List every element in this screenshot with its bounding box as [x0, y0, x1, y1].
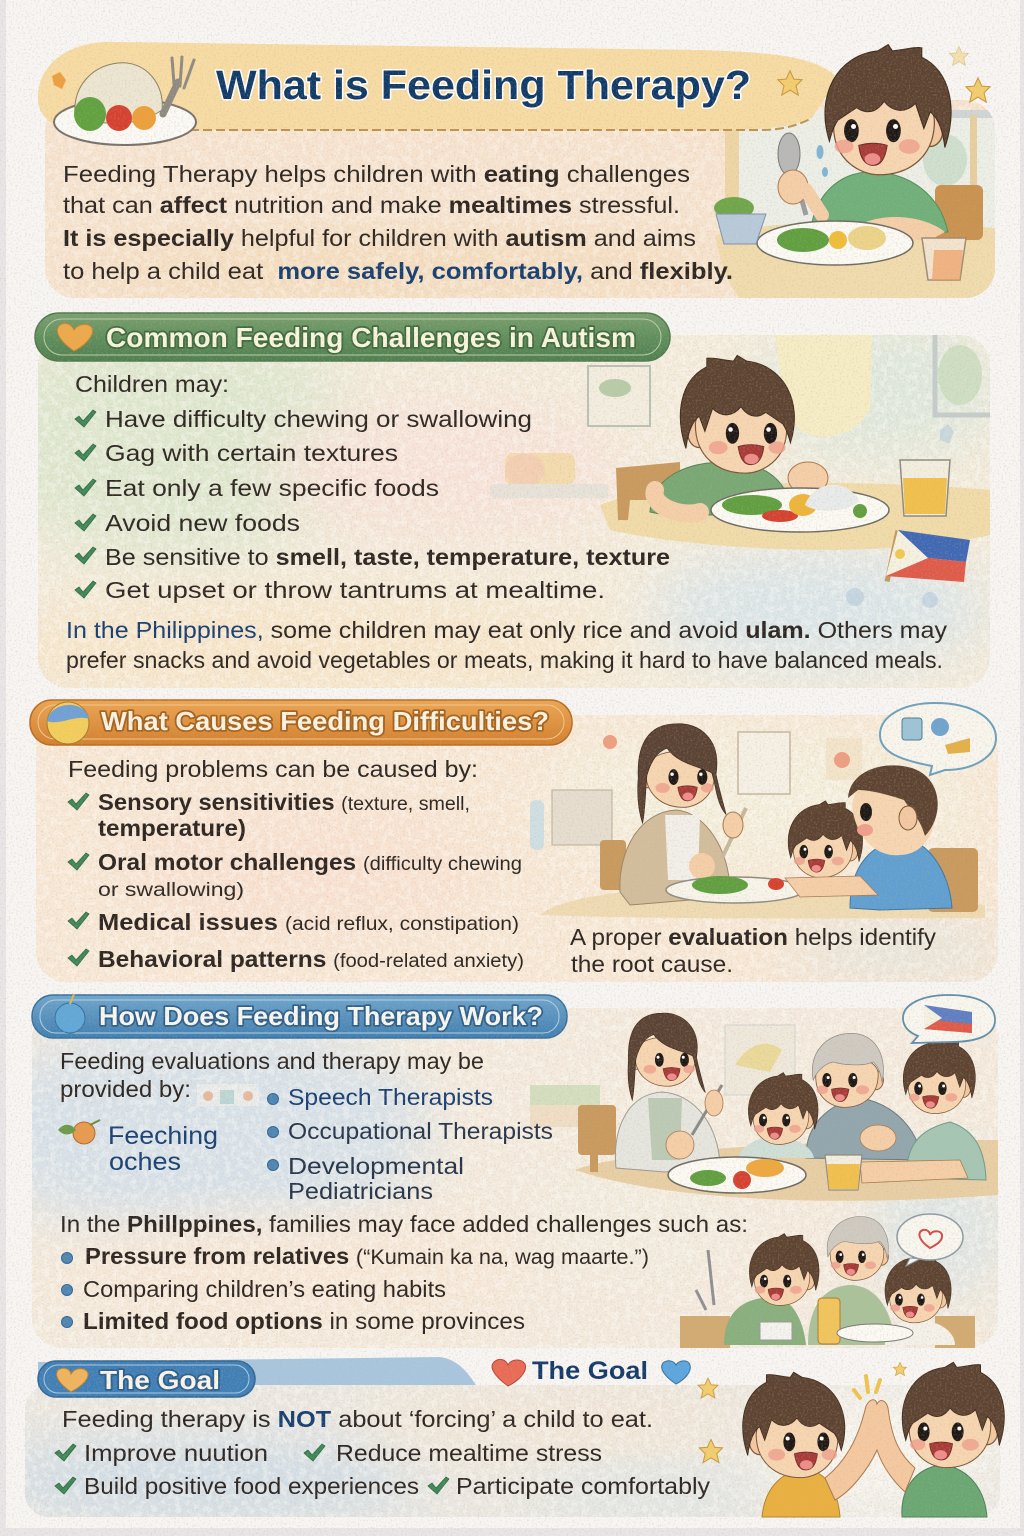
- challenges list: Eat only a few specific foods: [105, 475, 439, 501]
- panel: how does feeding therapy work: [0, 994, 1010, 1348]
- providers text: provided by:: [60, 1076, 191, 1102]
- light blue band: [38, 1357, 480, 1392]
- banner: the goal: [38, 1361, 255, 1397]
- goal text: Reduce mealtime stress: [336, 1440, 602, 1466]
- illustration: children high five: [743, 1362, 1004, 1517]
- wall pictures: [530, 732, 862, 850]
- icon: stars: [698, 1362, 907, 1463]
- providers text: Feeding evaluations and therapy may be: [60, 1048, 484, 1074]
- causes list: Medical issues (acid reflux, constipation): [98, 909, 519, 935]
- icon: heart: [57, 323, 93, 351]
- icon: small food stickers: [197, 1084, 259, 1106]
- speech bubble with heart: [897, 1214, 963, 1266]
- secondary goal label: [492, 1357, 690, 1386]
- glass of juice: [922, 238, 966, 280]
- wall picture: [588, 366, 650, 426]
- banner: what causes: [30, 700, 572, 745]
- added challenges text: In the Phillppines, families may face added challenges such as:: [60, 1211, 748, 1237]
- intro text: [63, 161, 733, 284]
- panel background: [38, 335, 990, 688]
- challenges list: Children may:: [75, 371, 229, 397]
- heading: What Causes Feeding Difficulties?: [101, 706, 549, 736]
- sparkle: [854, 1376, 880, 1398]
- icon: fruit: [58, 1120, 100, 1144]
- small boy: [788, 801, 863, 878]
- icon: stars: [52, 47, 990, 102]
- evaluation note: [570, 924, 937, 977]
- panel background: [0, 1008, 1010, 1348]
- providers text: Speech Therapists: [288, 1084, 493, 1110]
- philippines note: [66, 617, 948, 673]
- banner: how does it work: [32, 994, 567, 1038]
- challenges list: Get upset or throw tantrums at mealtime.: [105, 577, 605, 603]
- older boy: [860, 1039, 986, 1183]
- illustration: boy at table: [616, 355, 950, 532]
- illustration: boy with spoon: [714, 45, 983, 280]
- icon: apple: [55, 994, 85, 1033]
- glass of juice: [900, 460, 950, 516]
- causes list: temperature): [98, 815, 246, 841]
- heading: Common Feeding Challenges in Autism: [106, 322, 636, 353]
- plate of food: [757, 221, 913, 265]
- panel background: [36, 715, 1010, 982]
- mother: [615, 1013, 723, 1172]
- intro text: to help a child eat more safely, comfortably, and flexibly.: [63, 258, 733, 284]
- added challenges text: Limited food options in some provinces: [83, 1308, 525, 1334]
- challenges list: Avoid new foods: [105, 510, 300, 536]
- older boy: [785, 765, 952, 910]
- intro text: that can affect nutrition and make mealtimes stressful.: [63, 192, 680, 218]
- illustration: children with grandfather: [680, 1217, 975, 1348]
- window: [935, 335, 990, 415]
- causes list: Behavioral patterns (food-related anxiety): [98, 946, 524, 972]
- title: What is Feeding Therapy?: [216, 62, 751, 108]
- panel body: [45, 100, 995, 300]
- evaluation note: the root cause.: [571, 951, 733, 977]
- decorative splashes: [846, 424, 954, 608]
- small child: [738, 1073, 818, 1158]
- challenges list: Have difficulty chewing or swallowing: [105, 406, 532, 432]
- providers text: Developmental: [288, 1153, 464, 1179]
- causes list: Oral motor challenges (difficulty chewing: [98, 849, 522, 875]
- mother: [620, 724, 746, 905]
- header band: [38, 42, 838, 130]
- glass of juice: [825, 1155, 862, 1190]
- goal text: Participate comfortably: [456, 1473, 711, 1499]
- challenges list: [75, 371, 670, 603]
- panel: the goal: [0, 1357, 1004, 1520]
- challenges list: Be sensitive to smell, taste, temperature, texture: [105, 544, 670, 570]
- added challenges text: Comparing children’s eating habits: [83, 1276, 446, 1302]
- table: [575, 1140, 998, 1201]
- curtain: [775, 335, 872, 436]
- providers text: Feeching: [108, 1122, 218, 1150]
- panel: what causes feeding difficulties: [30, 700, 1010, 982]
- panel: common feeding challenges: [0, 313, 1000, 700]
- evaluation note: A proper evaluation helps identify: [570, 924, 937, 950]
- illustration: family at table: [578, 1013, 986, 1193]
- bread on counter: [490, 453, 608, 498]
- challenges list: Gag with certain textures: [105, 440, 398, 466]
- icon: water droplets: [816, 145, 828, 177]
- causes list: or swallowing): [98, 880, 244, 901]
- added challenges text: Pressure from relatives (“Kumain ka na, wag maarte.”): [85, 1243, 649, 1269]
- panel: what is feeding therapy: [38, 42, 995, 300]
- speech bubble with flag: [903, 995, 995, 1043]
- bowl of greens: [714, 197, 766, 244]
- secondary goal label: The Goal: [532, 1357, 648, 1385]
- plate of food: [668, 1157, 806, 1193]
- banner: common feeding challenges: [35, 313, 670, 361]
- heading: How Does Feeding Therapy Work?: [99, 1001, 543, 1031]
- added challenges text: [60, 1211, 748, 1334]
- philippines note: In the Philippines, some children may eat only rice and avoid ulam. Others may: [66, 617, 948, 643]
- intro text: It is especially helpful for children with autism and aims: [63, 225, 696, 251]
- providers text: Occupational Therapists: [288, 1118, 553, 1144]
- goal text: Improve nuution: [84, 1440, 268, 1466]
- providers text: oches: [109, 1148, 181, 1176]
- wall art: [530, 1025, 795, 1127]
- goal text: Build positive food experiences: [84, 1473, 419, 1499]
- speech bubble: [880, 703, 996, 775]
- plate of food: [666, 876, 804, 903]
- plate of food: [711, 485, 889, 532]
- causes list: [68, 756, 524, 972]
- icon: blue heart: [662, 1361, 690, 1384]
- table: [540, 892, 985, 918]
- heading: The Goal: [100, 1365, 220, 1395]
- providers text: Pediatricians: [288, 1178, 433, 1204]
- causes list: Sensory sensitivities (texture, smell,: [98, 789, 470, 815]
- icon: philippine flag: [885, 530, 970, 582]
- illustration: mother and two boys: [600, 724, 978, 912]
- grandfather: [806, 1033, 922, 1160]
- dashed divider: [190, 118, 812, 130]
- icon: plate with rice and fork: [54, 57, 196, 145]
- icon: red heart: [492, 1359, 526, 1386]
- providers text: [58, 1048, 553, 1204]
- goal text: [55, 1406, 711, 1499]
- goal text: Feeding therapy is NOT about ‘forcing’ a child to eat.: [62, 1406, 653, 1432]
- causes list: Feeding problems can be caused by:: [68, 756, 478, 782]
- intro text: Feeding Therapy helps children with eating challenges: [63, 161, 690, 187]
- table: [600, 483, 990, 550]
- panel background: [0, 1385, 1000, 1520]
- icon: bowl: [47, 702, 89, 744]
- icon: heart: [57, 1368, 88, 1392]
- philippines note: prefer snacks and avoid vegetables or meats, making it hard to have balanced meals.: [66, 647, 943, 673]
